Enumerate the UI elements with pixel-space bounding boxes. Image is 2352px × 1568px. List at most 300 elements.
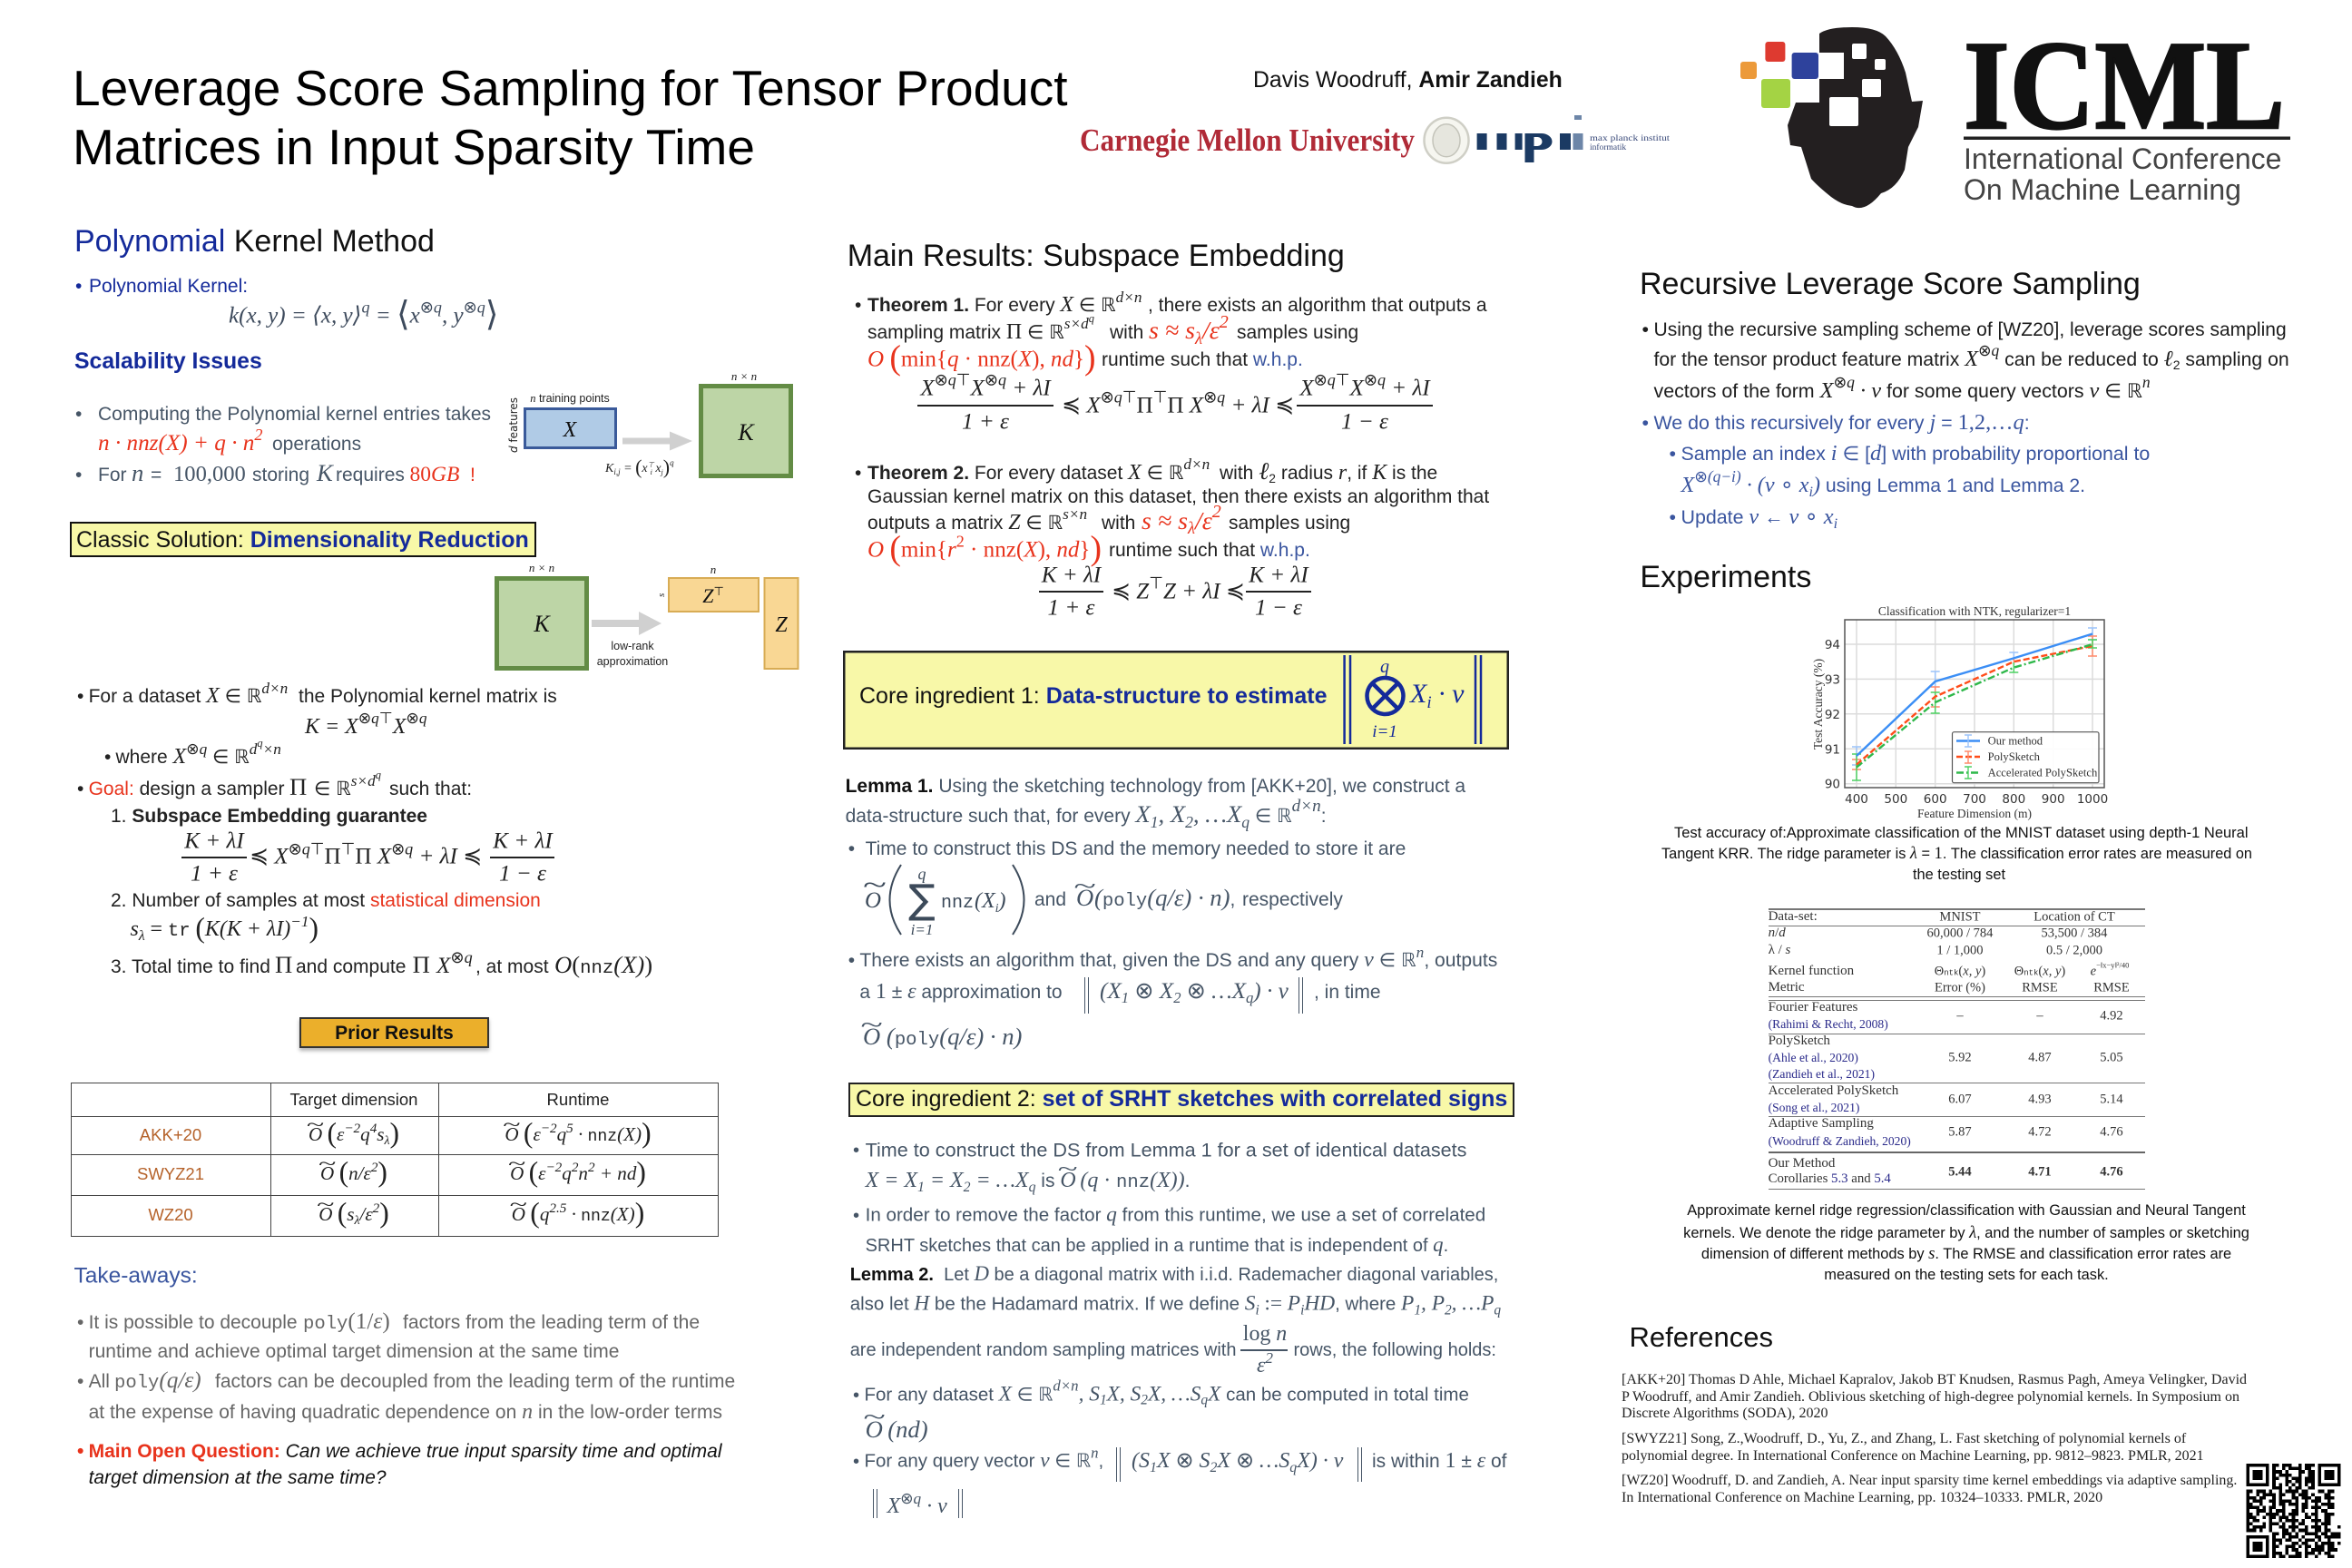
banner: dimensionality reduction: Classic Solution: xyxy=(76,527,244,553)
caption: kernel table: kernels. We denote the ridge parameter by λ, and the number of samples or sketching xyxy=(1683,1223,2249,1242)
panel: references: In International Conference on Machine Learning, pp. 10324–10333. PMLR, 2020 xyxy=(1622,1490,2102,1505)
table: experiments results: Location of CT xyxy=(2034,909,2115,924)
table: experiments results: RMSE xyxy=(2022,980,2058,995)
icon: head silhouette xyxy=(1788,27,1923,208)
formula: K: K = X⊗q⊤X⊗q xyxy=(305,710,426,739)
reference WZ20: [WZ20] Woodruff, D. and Zandieh, A. Near input sparsity time kernel embeddings via adaptive sampling. xyxy=(1622,1473,2237,1488)
panel: polynomial kernel method: = xyxy=(151,465,162,485)
table: experiments results: e−‖x−y‖²/40 xyxy=(2091,960,2129,978)
formula: construction bound: ~ xyxy=(863,870,887,900)
panel: lemma 2: • xyxy=(853,1206,859,1226)
tick labels: 700 xyxy=(1963,792,1986,807)
panel: polynomial kernel method: • xyxy=(75,465,82,485)
takeaway 1: It is possible to decouple xyxy=(89,1313,298,1334)
reference AKK+20: [AKK+20] Thomas D Ahle, Michael Kapralov, Jakob BT Knudsen, Rasmus Pagh, Ameya Velingker, David xyxy=(1622,1372,2247,1387)
item 3: 3. Total time to find xyxy=(111,956,270,977)
chart title: Classification with NTK, regularizer=1 xyxy=(1878,604,2071,618)
formula: construction bound: ) xyxy=(997,889,1006,913)
tick labels: 600 xyxy=(1924,792,1947,807)
panel: classic solution: , at most xyxy=(475,956,549,977)
diagram: X to K: x xyxy=(641,462,648,475)
heading: References xyxy=(1630,1321,1773,1353)
table: experiments results: Corollaries 5.3 and 5.4 xyxy=(1769,1171,1891,1186)
table: experiments results: Kernel function xyxy=(1769,964,1854,978)
diagram: X to K: ) xyxy=(663,456,670,478)
caption: MNIST chart: Test accuracy of:Approximate classification of the MNIST dataset using depth-1 Neural xyxy=(1674,824,2249,840)
legend: Our method xyxy=(1988,735,2043,748)
panel: main results: with xyxy=(1102,513,1135,534)
takeaway 2: All xyxy=(89,1371,110,1392)
table: experiments results: 5.87 xyxy=(1948,1124,1972,1139)
formula: construction bound: i xyxy=(995,902,999,916)
panel: core ingredient 2 xyxy=(848,1083,1514,1117)
table: experiments results: (Zandieh et al., 2021) xyxy=(1769,1067,1875,1081)
logos: Carnegie Mellon University and Max Planck Institute: informatik xyxy=(1590,142,1626,152)
reference SWYZ21: [SWYZ21] Song, Z.,Woodruff, D., Yu, Z., and Zhang, L. Fast sketching of polynomial kernels of xyxy=(1622,1431,2186,1446)
fraction: log n over epsilon squared xyxy=(1240,1325,1288,1379)
bullet: query algorithm: There exists an algorithm that, given the DS and any query v ∈ ℝn, outputs xyxy=(859,944,1497,972)
panel: take-aways: factors can be decoupled from the leading term of the runtime xyxy=(215,1371,735,1392)
table: experiments results: – xyxy=(2036,1008,2043,1023)
title xyxy=(73,60,1068,175)
table: prior results: O (ε−2q5 · nnz(X)) xyxy=(505,1117,652,1149)
caption: kernel table: Approximate kernel ridge regression/classification with Gaussian and Neural Tangent xyxy=(1687,1202,2246,1219)
panel: recursive leverage score sampling: vectors of the form X⊗q · v for some query vectors v ∈ ℝn xyxy=(1653,373,2151,403)
panel: main results: , there exists an algorithm that outputs a xyxy=(1148,295,1487,316)
panel: lemma 2: are independent random sampling matrices with xyxy=(850,1340,1236,1360)
series: PolySketch xyxy=(1857,646,2092,765)
diagram: low-rank approximation: low-rank xyxy=(611,640,654,652)
theorem 2 inequality: K + λI xyxy=(1042,563,1101,587)
panel: classic solution: and compute xyxy=(296,956,406,977)
panel: prior results xyxy=(71,1017,719,1237)
panel: lemma 2 xyxy=(850,1139,1506,1518)
panel: recursive leverage score sampling: • xyxy=(1642,318,1649,340)
panel: recursive leverage score sampling: for the tensor product feature matrix X⊗q can be reduced to ℓ2 sampling on xyxy=(1653,341,2289,372)
panel: lemma 1: • xyxy=(848,838,855,859)
panel: main results: Gaussian kernel matrix on this dataset, then there exists an algorithm that xyxy=(867,486,1489,507)
diagram: X to K: ⊤ xyxy=(648,461,655,469)
tick labels: 900 xyxy=(2042,792,2065,807)
tick labels: 500 xyxy=(1884,792,1907,807)
theorem 1 inequality: 1 − ε xyxy=(1341,409,1388,434)
panel: classic solution: Π xyxy=(275,951,292,978)
legend: PolySketch xyxy=(1988,750,2041,763)
table: experiments results: Θntk(x, y) xyxy=(2014,964,2065,978)
legend xyxy=(1953,732,2099,783)
panel: take-aways: runtime and achieve optimal target dimension at the same time xyxy=(89,1341,619,1362)
panel: recursive leverage score sampling xyxy=(1633,263,2314,535)
diagram: X to K: X xyxy=(563,418,578,442)
panel: take-aways: poly(1/ε) xyxy=(303,1310,390,1336)
table: experiments results: 1 / 1,000 xyxy=(1936,943,1984,957)
theorem 1 inequality: X⊗q⊤X⊗q + λI xyxy=(1299,371,1430,400)
logo: ICML: International Conference xyxy=(1964,142,2281,175)
table: prior results: O (sλ/ε2) xyxy=(318,1197,389,1229)
table: prior results: O (ε−2q2n2 + nd) xyxy=(510,1156,646,1188)
where clause: where X⊗q ∈ ℝdq×n xyxy=(116,737,281,769)
formula: sketch norm: (S1X ⊗ S2X ⊗ …SqX) · v xyxy=(1132,1449,1343,1475)
scalability heading: Scalability Issues xyxy=(74,349,262,374)
table: prior results: Target dimension xyxy=(290,1090,417,1109)
title: Matrices in Input Sparsity Time xyxy=(73,119,755,175)
panel: main results: samples using xyxy=(1229,513,1350,534)
bullet: dataset sketch time: For any dataset X ∈ ℝd×n, S1X, S2X, …SqX can be computed in total time xyxy=(864,1377,1469,1408)
panel: recursive leverage score sampling: X⊗(q−i) · (v ∘ xi) using Lemma 1 and Lemma 2. xyxy=(1681,467,2085,500)
diagram: low-rank approximation: s xyxy=(656,593,667,597)
theorem 1 inequality: ≼ X⊗q⊤Π⊤Π X⊗q + λI ≼ xyxy=(1062,387,1294,417)
panel: lemma 2: O (nd) xyxy=(866,1416,928,1443)
table: prior results: O (q2.5 · nnz(X)) xyxy=(512,1197,644,1229)
panel: main results: sampling matrix Π ∈ ℝs×dq xyxy=(867,312,1094,344)
tick labels: 90 xyxy=(1825,778,1840,792)
table: experiments results: n/d xyxy=(1769,926,1786,940)
legend: Accelerated PolySketch xyxy=(1988,766,2098,779)
diagram: X to K: K xyxy=(605,462,613,475)
theorem 2 inequality: 1 − ε xyxy=(1255,596,1302,621)
table: experiments results: 5.05 xyxy=(2100,1050,2123,1064)
label: Core ingredient 1: Data-structure to estimate xyxy=(859,683,1327,709)
panel: take-aways: • xyxy=(77,1441,83,1462)
table: prior results xyxy=(71,1083,719,1237)
formula: tensor norm: · v xyxy=(1432,679,1465,709)
tick labels: 1000 xyxy=(2077,792,2108,807)
formula: construction bound: O xyxy=(865,888,881,913)
series: Accelerated PolySketch xyxy=(1857,644,2092,768)
table: experiments results: 6.07 xyxy=(1948,1092,1972,1106)
kernel formula: k(x, y) = ⟨x, y⟩q = ⟨x⊗q, y⊗q⟩ xyxy=(229,295,498,333)
table: prior results: WZ20 xyxy=(148,1205,193,1224)
table: experiments results: – xyxy=(1956,1008,1964,1023)
heading: Take-aways: xyxy=(74,1263,198,1288)
panel: lemma 2: • xyxy=(853,1141,859,1161)
theorem 1: Theorem 1. For every X ∈ ℝd×n xyxy=(867,289,1142,317)
axis labels: Feature Dimension (m) xyxy=(1917,807,2032,820)
bullet: computing cost: Computing the Polynomial kernel entries takes xyxy=(98,404,491,425)
panel: take-aways: poly(q/ε) xyxy=(114,1368,201,1394)
panel: classic solution: Π xyxy=(289,773,307,800)
tick labels: 400 xyxy=(1845,792,1868,807)
line chart: classification with NTK xyxy=(1806,599,2114,821)
table: experiments results xyxy=(1769,908,2145,1191)
sub-bullet: sample index: Sample an index i ∈ [d] with probability proportional to xyxy=(1681,441,2150,466)
panel: take-aways: • xyxy=(77,1371,83,1392)
formula: tensor norm: i=1 xyxy=(1372,722,1397,741)
caption: kernel table: measured on the testing sets for each task. xyxy=(1824,1267,2109,1283)
table: experiments results: Θntk(x, y) xyxy=(1935,964,1985,978)
line chart: classification with NTK: Test Accuracy (%) xyxy=(1811,659,1825,750)
panel: recursive leverage score sampling: • xyxy=(1670,443,1676,465)
panel: lemma 1: , in time xyxy=(1314,982,1381,1003)
formula: query time: O (poly(q/ε) · n) xyxy=(863,1023,1022,1051)
panel: recursive leverage score sampling: • xyxy=(1670,506,1676,528)
table: experiments results: (Song et al., 2021) xyxy=(1769,1101,1859,1114)
panel: take-aways: factors from the leading term of the xyxy=(403,1313,700,1334)
caption: kernel table xyxy=(1679,1200,2259,1285)
subspace embedding inequality xyxy=(181,828,554,886)
theorem 2 inequality: ≼ Z⊤Z + λI ≼ xyxy=(1112,574,1245,603)
table: experiments results: RMSE xyxy=(2093,980,2130,995)
table: experiments results: (Ahle et al., 2020) xyxy=(1769,1051,1858,1064)
panel: lemma 2: rows, the following holds: xyxy=(1294,1340,1496,1360)
formula: tensor norm: i xyxy=(1426,693,1432,712)
diagram: X to K: = xyxy=(621,462,635,475)
table: experiments results: λ / s xyxy=(1769,943,1790,957)
formula: tensor norm xyxy=(1343,655,1483,744)
table: prior results: O (ε−2q4sλ) xyxy=(309,1117,399,1149)
formula: sketch norm xyxy=(1116,1447,1364,1482)
table: prior results: AKK+20 xyxy=(140,1125,201,1144)
table: experiments results: Our Method xyxy=(1769,1156,1835,1171)
heading: Recursive Leverage Score Sampling xyxy=(1640,267,2141,301)
panel: classic solution: • xyxy=(104,747,111,768)
panel: lemma 1: (poly(q/ε) · n), xyxy=(1094,884,1235,912)
formula: approximation norm: (X1 ⊗ X2 ⊗ …Xq) · v xyxy=(1100,979,1289,1007)
formula: construction bound: ∑ xyxy=(908,877,936,923)
button: prior results xyxy=(299,1017,489,1048)
panel: main results: s ≈ sλ/ε2 xyxy=(1149,312,1229,348)
formula: tensor norm xyxy=(873,1489,964,1519)
authors: Davis Woodruff, Amir Zandieh xyxy=(1253,68,1563,93)
subspace embedding inequality: K + λI xyxy=(493,828,553,853)
table: experiments results: 4.72 xyxy=(2028,1124,2052,1139)
panel: classic solution: Π xyxy=(413,951,430,978)
formula: tensor norm: q xyxy=(1380,657,1389,677)
formula: construction bound: i=1 xyxy=(911,921,933,938)
polynomial kernel label: Polynomial Kernel: xyxy=(89,276,248,297)
theorem 2 inequality: 1 + ε xyxy=(1048,596,1094,621)
series: our method xyxy=(1857,633,2092,756)
logos: Carnegie Mellon University and Max Planck Institute: Carnegie Mellon University xyxy=(1080,122,1415,158)
panel: classic solution: X⊗q xyxy=(436,948,473,978)
table: experiments results: PolySketch xyxy=(1769,1034,1830,1048)
table: prior results: Runtime xyxy=(547,1090,609,1109)
panel: classic solution: such that: xyxy=(389,779,472,799)
panel: recursive leverage score sampling: • xyxy=(1642,412,1649,434)
table: experiments results: Error (%) xyxy=(1935,980,1985,995)
panel: references: P Woodruff, and Amir Zandieh. Oblivious sketching of high-degree polynomial kernels. In Symposium on xyxy=(1622,1389,2239,1405)
panel: classic solution: ∈ ℝs×dq xyxy=(314,769,381,799)
panel: polynomial kernel method: storing xyxy=(252,465,309,485)
table: experiments results: 4.93 xyxy=(2028,1092,2052,1106)
panel: lemma 1: data-structure such that, for every X1, X2, …Xq ∈ ℝd×n: xyxy=(846,798,1327,831)
lemma 2 statement: Lemma 2. Let D be a diagonal matrix with i.i.d. Rademacher diagonal variables, xyxy=(850,1262,1498,1285)
table: experiments results: 4.76 xyxy=(2100,1164,2123,1179)
tick labels: 93 xyxy=(1825,672,1840,687)
logos: Carnegie Mellon University and Max Planck Institute: max planck institut xyxy=(1590,134,1670,143)
diagram: low-rank approximation: approximation xyxy=(597,655,668,668)
diagram: X to K: n training points xyxy=(530,392,610,405)
table: experiments results: Accelerated PolySketch xyxy=(1769,1083,1898,1098)
table: experiments results: 0.5 / 2,000 xyxy=(2046,943,2102,957)
theorem 2 inequality: K + λI xyxy=(1249,563,1308,587)
panel: polynomial kernel method: 100,000 xyxy=(173,462,246,486)
table: experiments results: Data-set: xyxy=(1769,909,1818,924)
subspace embedding inequality: 1 − ε xyxy=(499,861,546,886)
panel: take-aways: target dimension at the same time? xyxy=(89,1467,387,1488)
panel: lemma 1: a 1 ± ε approximation to xyxy=(859,980,1063,1004)
bullet: recursion: We do this recursively for every j = 1,2,…q: xyxy=(1653,410,2030,435)
statistical dimension formula: sλ = tr (K(K + λI)−1) xyxy=(131,912,318,944)
bullet: reduction: Using the recursive sampling scheme of [WZ20], leverage scores sampling xyxy=(1653,319,2287,340)
diagram: X to K: ( xyxy=(635,456,642,478)
panel: main results: O (min{q · nnz(X), nd}) xyxy=(867,338,1096,377)
panel: main results: with xyxy=(1110,322,1143,343)
fraction: log n over epsilon squared: log n xyxy=(1243,1322,1287,1346)
panel: lemma 1: • xyxy=(848,950,855,971)
panel: classic solution: • xyxy=(77,779,83,799)
theorem 2 inequality xyxy=(1039,563,1311,621)
theorem 1 inequality xyxy=(917,371,1433,434)
panel: lemma 2: X = X1 = X2 = …Xq is O (q · nnz(X)). xyxy=(866,1169,1190,1195)
panel: lemma 1 xyxy=(846,776,1497,1051)
diagram: X to K: q xyxy=(670,458,674,467)
theorem 2: Theorem 2. For every dataset X ∈ ℝd×n xyxy=(867,456,1210,485)
bullet: storage: For xyxy=(98,465,127,485)
panel: main results: • xyxy=(855,463,861,484)
main open question: Main Open Question: Can we achieve true input sparsity time and optimal xyxy=(89,1441,722,1462)
diagram: X to K: i,j xyxy=(613,467,621,476)
label: Core ingredient 2: set of SRHT sketches with correlated signs xyxy=(856,1086,1507,1112)
panel: polynomial kernel method: n xyxy=(132,459,143,486)
item 2: 2. Number of samples at most statistical dimension xyxy=(111,890,541,911)
formula: approximation norm xyxy=(1084,977,1303,1014)
caption: MNIST chart: the testing set xyxy=(1913,867,2005,883)
table: experiments results: 5.14 xyxy=(2100,1092,2123,1106)
panel: polynomial kernel method: • xyxy=(75,276,82,297)
diagram: low-rank approximation: Z xyxy=(702,584,713,607)
panel: main results: with ℓ2 radius r, if K is the xyxy=(1220,457,1437,485)
item 1: 1. Subspace Embedding guarantee xyxy=(111,806,427,827)
sub-bullet: update: Update v ← v ∘ xi xyxy=(1681,505,1838,532)
table: experiments results: Adaptive Sampling xyxy=(1769,1116,1874,1131)
bullet: correlated sketches: In order to remove the factor q from this runtime, we use a set of correlated xyxy=(866,1203,1485,1227)
panel: main results: s ≈ sλ/ε2 xyxy=(1142,503,1221,538)
logo: ICML: On Machine Learning xyxy=(1964,173,2241,206)
error bars xyxy=(1852,628,2097,765)
panel: polynomial kernel method: K xyxy=(317,459,333,486)
table: experiments results: 4.87 xyxy=(2028,1050,2052,1064)
diagram: low-rank approximation xyxy=(495,561,799,671)
button: prior results: Prior Results xyxy=(335,1023,454,1044)
table: prior results: O (n/ε2) xyxy=(320,1156,387,1188)
panel: main results: samples using xyxy=(1237,322,1358,343)
table: experiments results: Metric xyxy=(1769,980,1805,995)
bullet: identical datasets: Time to construct the DS from Lemma 1 for a set of identical datasets xyxy=(866,1139,1466,1161)
heading: experiments: Experiments xyxy=(1640,559,1811,593)
tick labels: 94 xyxy=(1825,638,1840,652)
panel: lemma 1: respectively xyxy=(1242,889,1343,910)
diagram: low-rank approximation: ⊤ xyxy=(713,584,724,598)
lemma statement: Lemma 1. Using the sketching technology from [AKK+20], we construct a xyxy=(846,776,1465,797)
panel: lemma 2: • xyxy=(853,1385,859,1405)
table: experiments results: 53,500 / 384 xyxy=(2042,926,2107,940)
icon: QR code xyxy=(2246,1464,2341,1558)
caption: MNIST chart: Tangent KRR. The ridge parameter is λ = 1. The classification error rates are measured on xyxy=(1661,844,2252,863)
formula: construction bound xyxy=(863,864,1025,938)
diagram: X to K: i xyxy=(651,468,652,476)
formula: tensor norm: X xyxy=(1410,679,1426,709)
panel: take-aways xyxy=(74,1263,735,1488)
panel: main results: • xyxy=(855,295,861,316)
panel: classic solution xyxy=(70,522,799,979)
diagram: low-rank approximation: K xyxy=(533,611,551,637)
panel: lemma 2: also let H be the Hadamard matrix. If we define Si := PiHD, where P1, P2, …Pq xyxy=(850,1292,1501,1318)
caption: MNIST chart xyxy=(1656,821,2264,887)
diagram: X to K: K xyxy=(737,419,755,446)
diagram: X to K: j xyxy=(661,468,664,476)
panel: polynomial kernel method: • xyxy=(75,404,82,425)
panel: lemma 1: O xyxy=(1076,884,1093,911)
diagram: X to K xyxy=(508,369,793,478)
diagram: X to K: x xyxy=(652,462,662,475)
cost formula: n · nnz(X) + q · n2 xyxy=(98,426,262,456)
panel: classic solution: the Polynomial kernel matrix is xyxy=(299,686,557,707)
bullet: query vector: For any query vector v ∈ ℝn, xyxy=(864,1445,1103,1473)
title: Leverage Score Sampling for Tensor Product xyxy=(73,60,1068,116)
panel: lemma 2: • xyxy=(853,1452,859,1472)
tick labels: 91 xyxy=(1825,742,1840,757)
panel: main results xyxy=(848,238,1490,621)
goal: Goal: design a sampler xyxy=(89,779,285,799)
formula: construction bound: nnz xyxy=(941,893,974,914)
subspace embedding inequality: 1 + ε xyxy=(191,861,238,886)
panel: take-aways: • xyxy=(77,1313,83,1334)
logo: ICML xyxy=(1740,18,2290,209)
panel: core ingredient 1 xyxy=(843,651,1509,750)
table: experiments results: (Rahimi & Recht, 2008) xyxy=(1769,1017,1888,1031)
subspace embedding inequality: ≼ X⊗q⊤Π⊤Π X⊗q + λI ≼ xyxy=(250,839,482,869)
panel: references: Discrete Algorithms (SODA), 2020 xyxy=(1622,1406,1828,1421)
table: experiments results: MNIST xyxy=(1939,909,1981,924)
panel: polynomial kernel method: operations xyxy=(272,434,361,455)
heading: Polynomial Kernel Method xyxy=(74,223,435,258)
banner: dimensionality reduction xyxy=(70,522,536,557)
logos: Carnegie Mellon University and Max Planck Institute xyxy=(1080,115,1670,164)
table: experiments results: Fourier Features xyxy=(1769,1000,1857,1014)
panel: lemma 2: is within 1 ± ε of xyxy=(1372,1449,1506,1473)
panel: polynomial kernel method: ! xyxy=(470,465,475,485)
panel: references: polynomial degree. In International Conference on Machine Learning, pp. 9812–9823. PMLR, 2021 xyxy=(1622,1448,2204,1464)
table: prior results: SWYZ21 xyxy=(137,1164,204,1183)
heading: Main Results: Subspace Embedding xyxy=(848,238,1345,272)
tick labels: 92 xyxy=(1825,708,1840,722)
panel: references xyxy=(1620,1316,2246,1511)
panel: polynomial kernel method: requires xyxy=(336,465,405,485)
caption: kernel table: dimension of different methods by s. The RMSE and classification error rates are xyxy=(1701,1244,2231,1263)
panel: main results: runtime such that w.h.p. xyxy=(1102,350,1303,371)
panel: main results: outputs a matrix Z ∈ ℝs×n xyxy=(867,505,1087,534)
theorem 1 inequality: X⊗q⊤X⊗q + λI xyxy=(920,371,1051,400)
diagram: X to K: n × n xyxy=(731,369,757,383)
banner: dimensionality reduction: Dimensionality Reduction xyxy=(250,527,529,553)
panel: classic solution: • xyxy=(77,686,83,707)
panel: main results: runtime such that w.h.p. xyxy=(1109,540,1310,561)
panel: polynomial kernel method xyxy=(74,223,793,486)
table: experiments results: 4.92 xyxy=(2100,1008,2123,1023)
diagram: low-rank approximation: n × n xyxy=(529,561,554,574)
subspace embedding inequality: K + λI xyxy=(184,828,244,853)
formula: construction bound: (X xyxy=(975,889,995,913)
table: experiments results: 60,000 / 784 xyxy=(1927,926,1993,940)
formula: memory bound: and xyxy=(1034,889,1066,910)
panel: main results: O (min{r2 · nnz(X), nd}) xyxy=(867,529,1102,567)
panel: classic solution: O(nnz(X)) xyxy=(554,951,652,979)
table: experiments results: 4.76 xyxy=(2100,1124,2123,1139)
table: experiments results: (Woodruff & Zandieh, 2020) xyxy=(1769,1134,1911,1148)
table: experiments results: 5.44 xyxy=(1948,1164,1972,1179)
bullet: construction time: Time to construct this DS and the memory needed to store it are xyxy=(866,838,1406,859)
